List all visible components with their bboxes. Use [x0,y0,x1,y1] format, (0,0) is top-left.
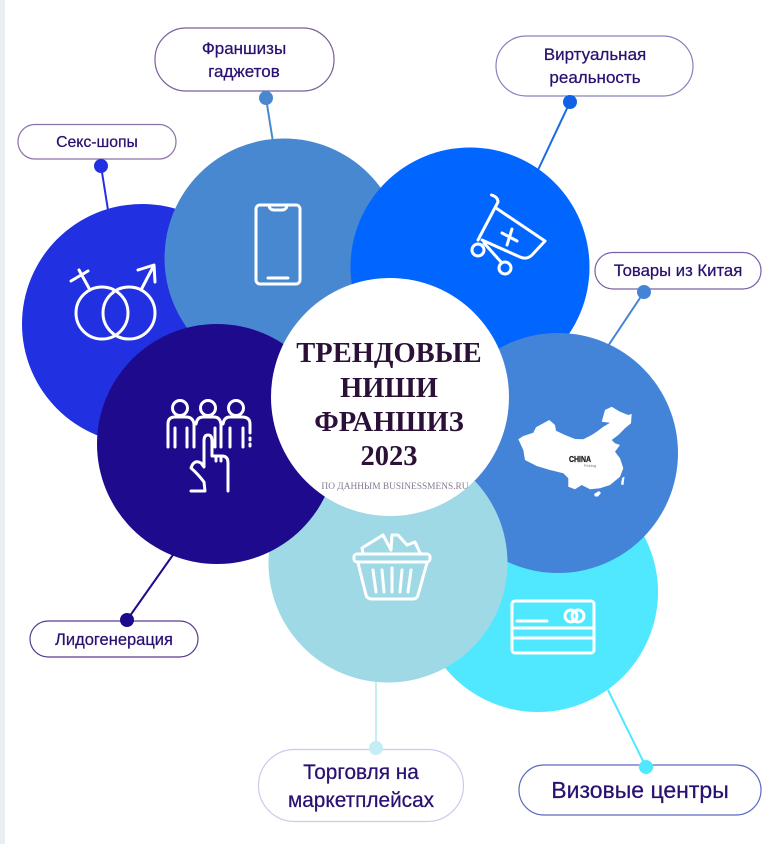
connector: goods from China [608,285,651,346]
circle: marketplaces [268,444,508,682]
title: ТРЕНДОВЫЕ [296,338,482,369]
circle: goods from China [438,333,678,573]
icon: gender symbols [71,265,155,339]
icon: map of China: Peking [584,463,596,468]
label: goods from China: Товары из Китая [614,261,742,280]
label: marketplaces: Торговля на [303,761,419,784]
label: lead generation: Лидогенерация [55,631,173,649]
label: goods from China [595,252,761,289]
label: marketplaces: маркетплейсах [288,789,435,812]
icon: bank card [512,601,594,653]
label: visa centres: Визовые центры [551,777,729,803]
label: lead generation [30,621,198,657]
connector: marketplaces [369,678,383,755]
icon: crowd with pointing hand [168,400,250,491]
icon: shopping cart with plus [472,195,545,274]
map label: CHINA [569,454,591,464]
label: virtual reality: Виртуальная [544,45,646,64]
circle: centre [271,278,509,516]
label: visa centres [519,765,761,815]
label: gadgets [155,28,334,91]
title [296,338,482,472]
title: 2023 [360,441,418,472]
title: ФРАНШИЗ [314,407,464,438]
circle: sex shops [22,204,262,444]
connector: gadgets [259,91,273,142]
label: sex shops: Секс-шопы [56,134,138,151]
circle: virtual reality [350,148,590,386]
circle: gadgets [164,138,404,378]
label: gadgets: гаджетов [208,62,280,81]
label: virtual reality: реальность [549,68,641,87]
connector: virtual reality [538,95,577,170]
title: НИШИ [340,373,438,404]
circle: lead generation [97,324,337,564]
connector: visa centres [608,690,653,774]
label: virtual reality [496,36,693,96]
circle: visa centres [418,472,658,712]
connector: sex shops [94,159,108,210]
connector: lead generation [120,552,175,627]
icon: basket [354,535,430,599]
label: marketplaces [258,750,464,822]
icon: smartphone [256,205,300,284]
label: sex shops [18,124,176,159]
label: gadgets: Франшизы [202,39,286,58]
source note: ПО ДАННЫМ BUSINESSMENS.RU [321,482,469,492]
icon: map of China [518,407,632,496]
